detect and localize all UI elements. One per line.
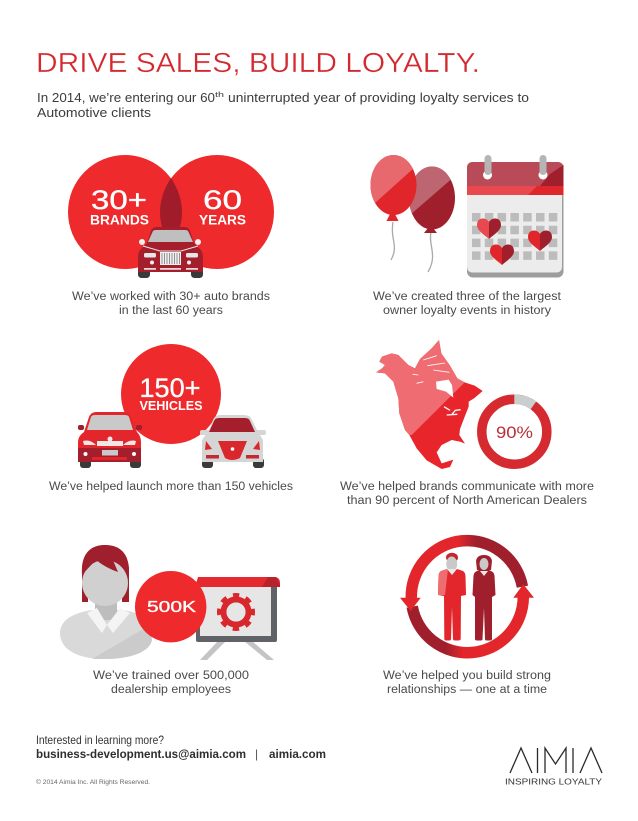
icon: woman bbox=[472, 555, 496, 640]
icon: heart three bbox=[490, 245, 514, 265]
caption: vehicles: We’ve helped launch more than 150 vehicles bbox=[49, 481, 293, 493]
panel: loyalty events bbox=[370, 155, 564, 317]
venn circles bbox=[68, 155, 274, 269]
donut chart: 90% bbox=[482, 399, 547, 464]
panel: training bbox=[60, 545, 280, 696]
stat: 30+ brands: BRANDS bbox=[90, 212, 149, 228]
icon: circular arrows bbox=[400, 541, 534, 653]
stat: 60 years bbox=[199, 185, 246, 228]
icon: employee bbox=[60, 545, 152, 659]
panel: relationships bbox=[383, 541, 551, 696]
caption: relationships bbox=[383, 670, 551, 696]
donut chart: 90%: 90% bbox=[496, 424, 533, 442]
icon: heart two bbox=[528, 231, 552, 251]
icon: man bbox=[438, 553, 466, 640]
stat circle: 150+ vehicles bbox=[121, 344, 221, 444]
caption: training: dealership employees bbox=[111, 684, 231, 696]
caption: events: owner loyalty events in history bbox=[383, 305, 551, 317]
logo: AIMIA bbox=[505, 748, 602, 786]
contact text bbox=[36, 733, 326, 761]
intro text: Automotive clients bbox=[37, 106, 151, 120]
icon: balloons bbox=[370, 155, 455, 272]
caption: brands: in the last 60 years bbox=[119, 305, 223, 317]
contact text: aimia.com bbox=[269, 747, 326, 761]
stat: 60 years: YEARS bbox=[199, 212, 246, 228]
stat: 60 years: 60 bbox=[203, 185, 242, 215]
intro text: th bbox=[215, 90, 224, 99]
icon: heart one bbox=[477, 219, 501, 239]
icon: silver car bbox=[200, 415, 266, 468]
panel: brands and years bbox=[68, 155, 274, 317]
icon: calendar bbox=[467, 155, 564, 278]
caption: training: We’ve trained over 500,000 bbox=[93, 670, 249, 682]
contact text: business-development.us@aimia.com bbox=[36, 747, 246, 761]
panel: vehicles bbox=[49, 344, 293, 493]
copyright: © 2014 Aimia Inc. All Rights Reserved. bbox=[36, 779, 150, 786]
stat circle: 150+ vehicles: 150+ bbox=[140, 373, 200, 403]
caption: relationships: We’ve helped you build strong bbox=[383, 670, 551, 682]
contact text: Interested in learning more? bbox=[36, 733, 164, 747]
intro text: uninterrupted year of providing loyalty services to bbox=[228, 91, 529, 105]
caption: relationships: relationships — one at a time bbox=[387, 684, 547, 696]
caption: events bbox=[373, 291, 562, 317]
caption: brands: We’ve worked with 30+ auto brands bbox=[72, 291, 270, 303]
caption: dealers: than 90 percent of North American Dealers bbox=[347, 495, 587, 507]
stat: 30+ brands: 30+ bbox=[91, 185, 147, 215]
title: DRIVE SALES, BUILD LOYALTY. bbox=[36, 47, 480, 78]
intro text bbox=[37, 90, 529, 120]
intro text: In 2014, we’re entering our 60 bbox=[37, 91, 215, 105]
panel: dealer reach bbox=[340, 340, 594, 507]
map: North America bbox=[376, 340, 483, 469]
logo: AIMIA: INSPIRING LOYALTY bbox=[505, 776, 602, 786]
caption: dealers bbox=[340, 481, 594, 507]
stat circle: 150+ vehicles: VEHICLES bbox=[140, 399, 202, 413]
caption: brands bbox=[72, 291, 270, 317]
icon: presentation board bbox=[195, 577, 280, 660]
icon: luxury car bbox=[138, 227, 203, 278]
icon: red car bbox=[78, 412, 142, 468]
icon: gear bbox=[220, 596, 252, 628]
stat: 30+ brands bbox=[90, 185, 149, 228]
caption: dealers: We’ve helped brands communicate with more bbox=[340, 481, 594, 493]
stat circle: 500K: 500K bbox=[147, 599, 196, 616]
contact text: | bbox=[255, 747, 258, 761]
caption: training bbox=[93, 670, 249, 696]
caption: events: We’ve created three of the largest bbox=[373, 291, 562, 303]
stat circle: 500K bbox=[135, 571, 206, 642]
